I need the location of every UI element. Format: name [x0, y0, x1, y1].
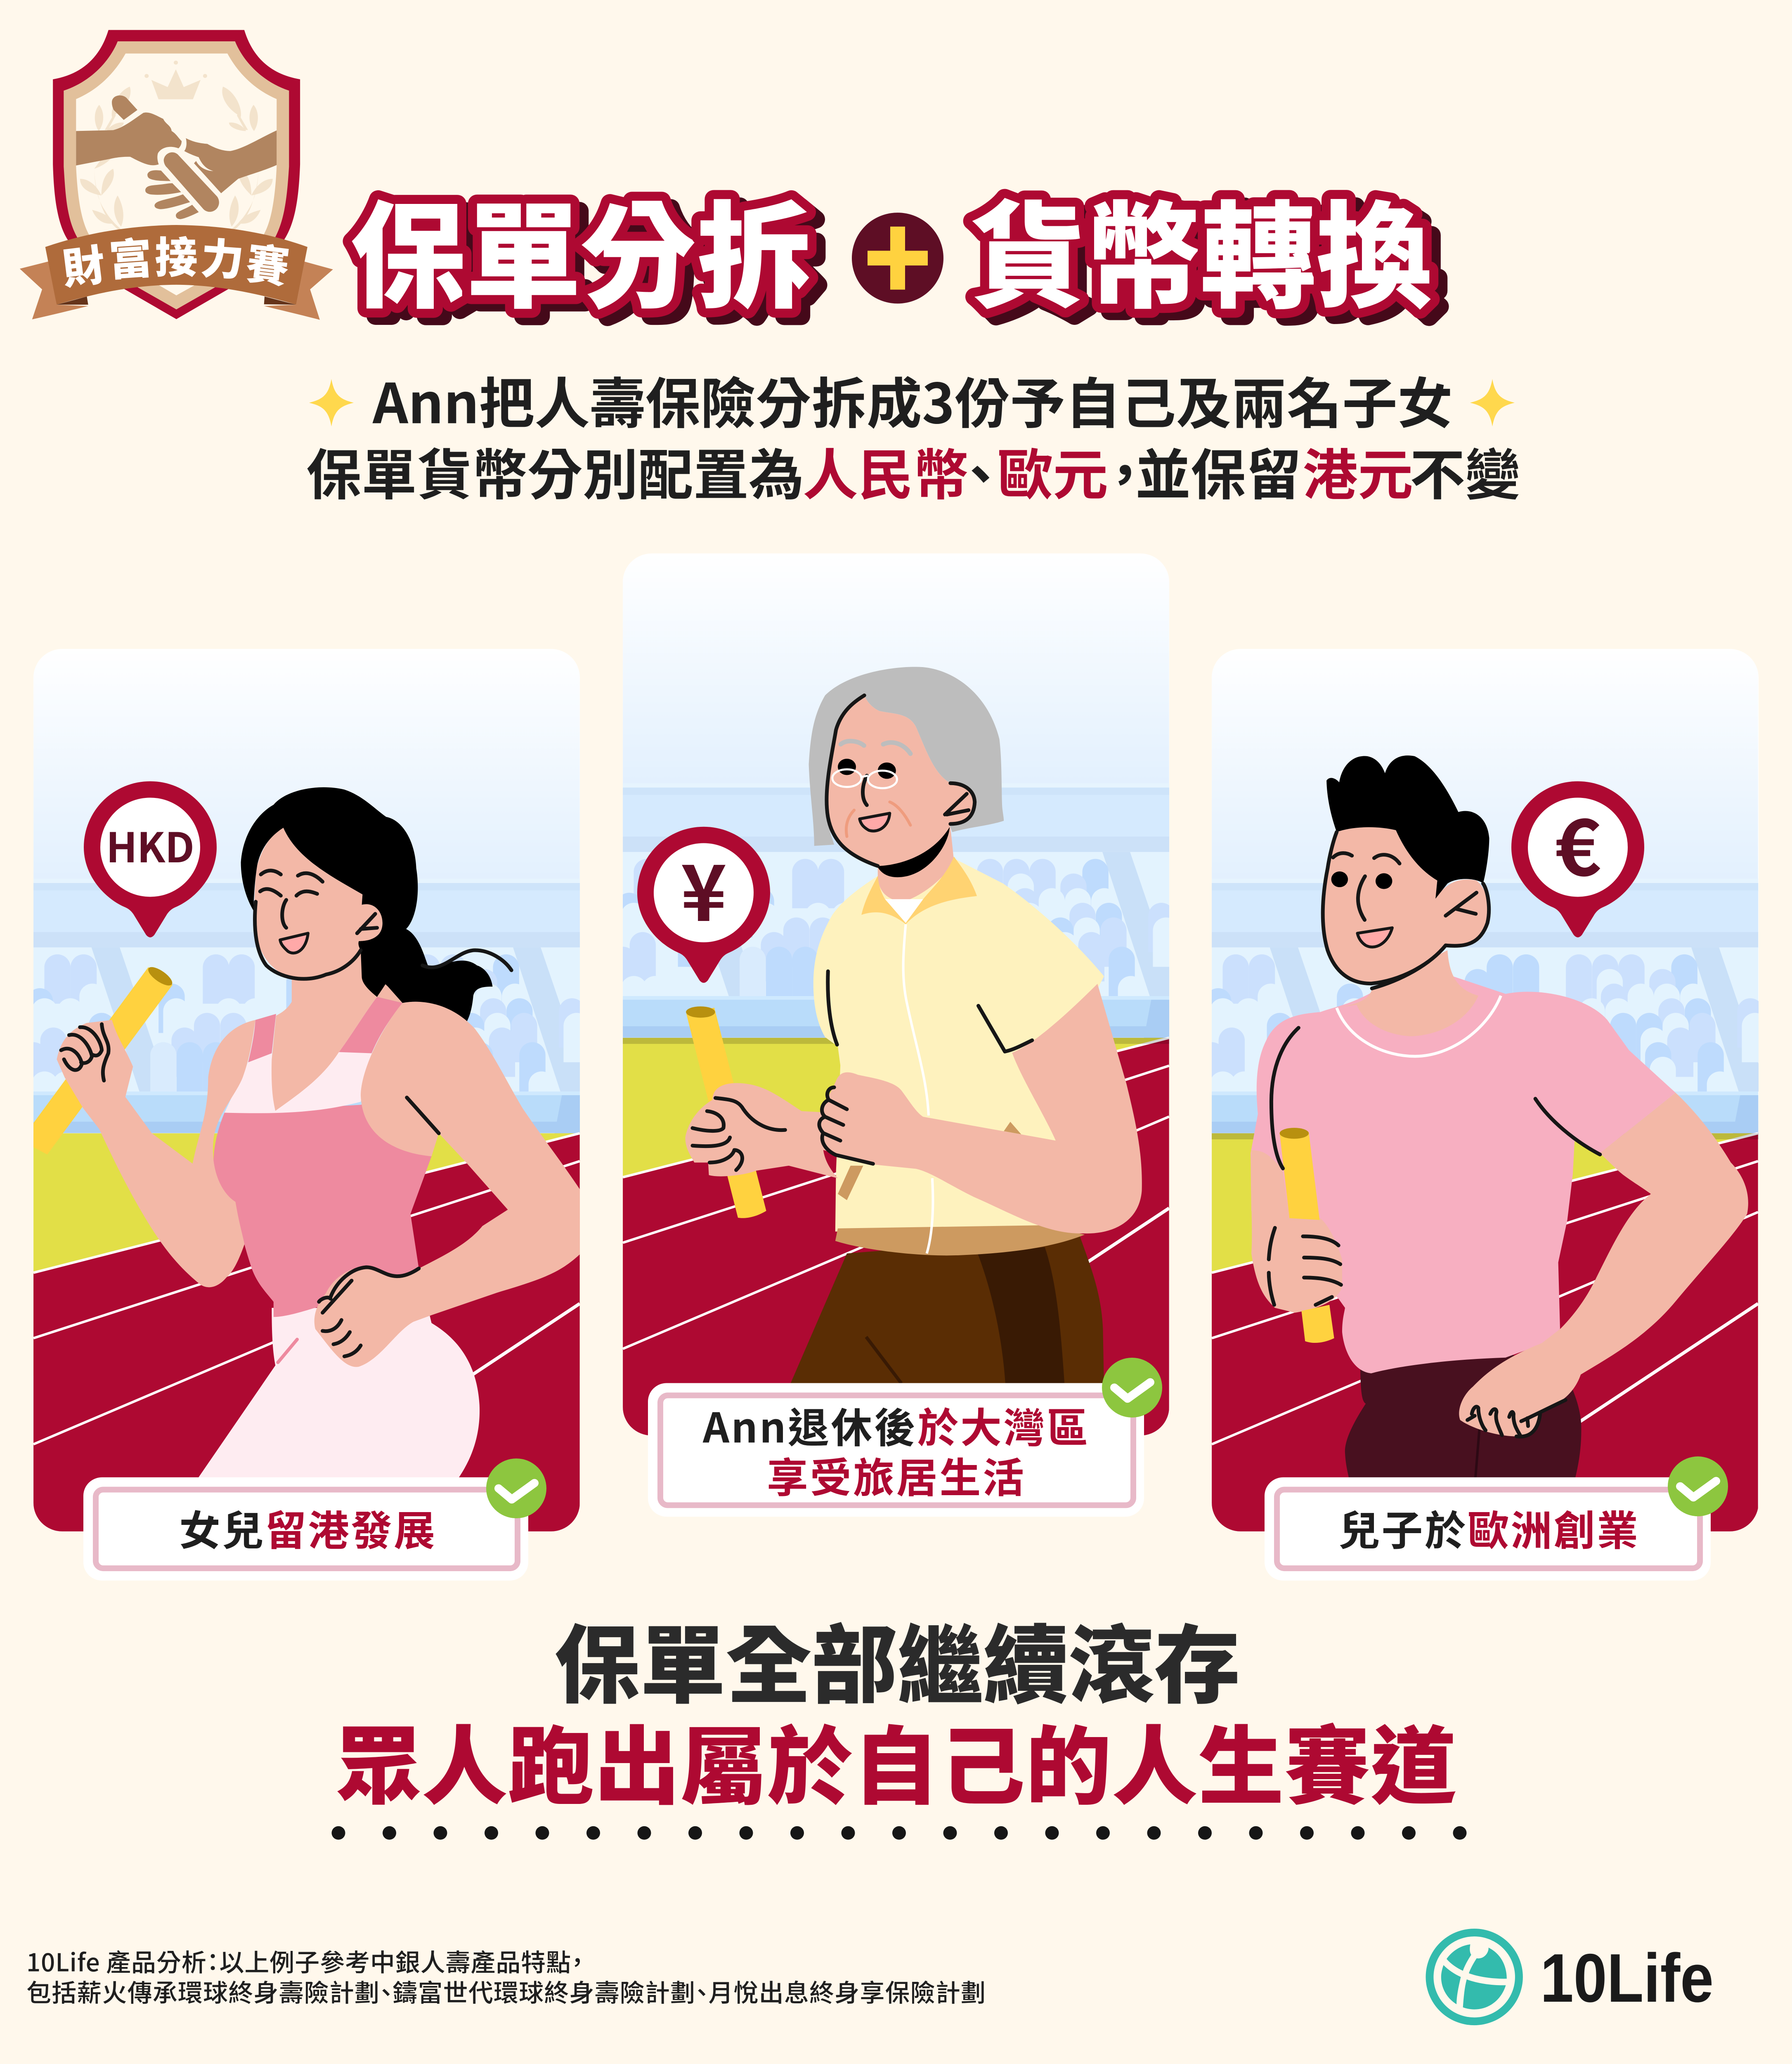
- label: son starts a business in Europe: [1265, 1477, 1711, 1581]
- field shade strip: [1212, 1133, 1759, 1139]
- plus icon: [852, 213, 943, 303]
- stadium scene: [1199, 649, 1768, 1666]
- check mark: [1668, 1456, 1728, 1516]
- stadium scene: [623, 618, 1169, 1435]
- title left: policy split: 保單分拆: [350, 193, 812, 322]
- currency pin: HKD: HKD: [106, 815, 194, 874]
- subtitle line 2: 歐元: [998, 431, 1108, 511]
- badge: wealth relay race shield: 富: [108, 234, 154, 285]
- subtitle line 2: 港元: [1303, 431, 1413, 511]
- badge: wealth relay race shield: 財: [59, 241, 108, 294]
- title right: currency conversion: 貨幣轉換: [970, 193, 1432, 322]
- subtitle line 2: 人民幣: [803, 431, 969, 511]
- badge: wealth relay race shield: 力: [199, 234, 245, 285]
- footnote: [26, 1943, 986, 2009]
- panel: daughter: [33, 649, 580, 1581]
- currency pin: EUR: €: [1555, 785, 1601, 898]
- subtitle line 2: 並保留: [1135, 431, 1301, 511]
- label: daughter stays in Hong Kong: 女兒留港發展: [179, 1498, 435, 1557]
- title left: policy split: 保單分拆: [359, 201, 821, 330]
- panel: Ann: [610, 553, 1179, 1570]
- label: son starts a business in Europe: 兒子於歐洲創業: [1338, 1498, 1638, 1557]
- icon: right star: [1470, 379, 1515, 426]
- check mark: [486, 1458, 546, 1518]
- subtitle line 2: ，: [1111, 431, 1139, 511]
- check mark: [1102, 1358, 1162, 1418]
- headline line 2: 眾人跑出屬於自己的人生賽道: [336, 1698, 1456, 1822]
- stadium scene: [33, 714, 580, 1531]
- footnote line 1: 10Life 產品分析：以上例子參考中銀人壽產品特點，: [26, 1943, 584, 1979]
- subtitle line 1: Ann把人壽保險分拆成3份予自己及兩名子女: [372, 360, 1453, 439]
- footnote line 2: 包括薪火傳承環球終身壽險計劃、鑄富世代環球終身壽險計劃、月悅出息終身享保險計劃: [26, 1974, 986, 2009]
- subtitle line 2: 、: [967, 431, 994, 511]
- label: Ann retires to Greater Bay Area: Ann退休後於大灣區: [702, 1395, 1088, 1454]
- currency pin: RMB: ¥: [681, 831, 727, 944]
- icon: left star: [309, 379, 354, 426]
- badge: wealth relay race shield: 接: [155, 234, 198, 282]
- figure: son running: [1251, 755, 1748, 1481]
- headline line 1: 保單全部繼續滾存: [554, 1597, 1240, 1721]
- figure: Ann running: [685, 667, 1142, 1388]
- dotted divider: [338, 1826, 1461, 1840]
- panel: son: [1199, 649, 1768, 1666]
- label: daughter stays in Hong Kong: [83, 1477, 528, 1581]
- title: [350, 193, 1441, 330]
- figure: daughter running: [33, 787, 584, 1477]
- currency pin: EUR: [1511, 781, 1644, 937]
- logo: 10Life: 10Life: [1540, 1940, 1714, 2017]
- logo: 10Life: [1426, 1929, 1714, 2025]
- label: Ann retires to Greater Bay Area: 享受旅居生活: [767, 1445, 1024, 1504]
- currency pin: HKD: [84, 781, 217, 937]
- label: Ann retires to Greater Bay Area: [648, 1383, 1144, 1517]
- field shade strip: [623, 1038, 1169, 1044]
- currency pin: RMB: [637, 827, 770, 983]
- subtitle: [306, 360, 1520, 511]
- bottom headline: [336, 1597, 1456, 1822]
- badge: wealth relay race shield: 賽: [244, 240, 292, 292]
- title right: currency conversion: 貨幣轉換: [979, 201, 1441, 330]
- subtitle line 2: 保單貨幣分別配置為: [306, 431, 804, 511]
- subtitle line 2: 不變: [1410, 431, 1520, 511]
- badge: wealth relay race shield: [20, 30, 333, 320]
